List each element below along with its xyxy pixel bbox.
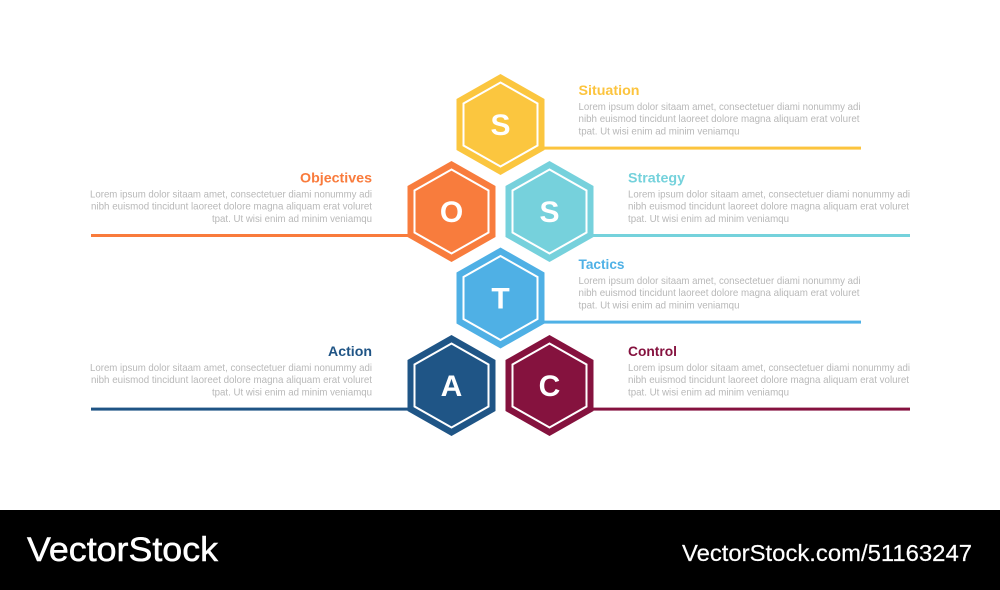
footer image id: VectorStock.com/51163247 [682,540,972,566]
text block: Action: nibh euismod tincidunt laoreet dolore magna aliquam erat voluret [91,375,372,386]
hexagon: S Strategy [506,161,594,262]
heading: Situation: Situation [578,82,640,98]
text block: Strategy [628,190,910,225]
heading: Strategy: Strategy [628,170,685,186]
panel: Tactics [456,248,861,348]
panel: Control [506,335,910,436]
text block: Action: Lorem ipsum dolor sitaam amet, consectetuer diami nonummy adi [90,363,372,374]
hexagon: O Objectives [408,161,496,262]
text block: Control: tpat. Ut wisi enim ad minim veniamqu [628,388,789,398]
text block: Tactics [578,276,860,312]
text block: Strategy: tpat. Ut wisi enim ad minim veniamqu [628,214,789,225]
heading: Objectives: Objectives [300,170,372,186]
text block: Situation: Lorem ipsum dolor sitaam amet, consectetuer diami nonummy adi [578,102,860,113]
text block: Action: tpat. Ut wisi enim ad minim veniamqu [212,388,372,398]
panel: Situation [456,74,861,175]
heading: Control: Control [628,343,677,359]
text block: Objectives: tpat. Ut wisi enim ad minim veniamqu [212,214,372,225]
hexagon: T Tactics: T [491,282,510,316]
text block: Control: nibh euismod tincidunt laoreet dolore magna aliquam erat voluret [628,375,909,386]
text block: Strategy: Lorem ipsum dolor sitaam amet, consectetuer diami nonummy adi [628,190,910,200]
text block: Situation: tpat. Ut wisi enim ad minim veniamqu [578,126,740,138]
hexagon: S Situation: S [490,109,511,142]
heading: Tactics: Tactics [578,256,625,272]
text block: Tactics: Lorem ipsum dolor sitaam amet, consectetuer diami nonummy adi [578,276,860,287]
hexagon: O Objectives: O [440,196,463,229]
text block: Tactics: nibh euismod tincidunt laoreet dolore magna aliquam erat voluret [578,288,860,299]
hexagon: C Control [506,335,594,436]
text block: Control: Lorem ipsum dolor sitaam amet, consectetuer diami nonummy adi [628,363,910,374]
text block: Action [90,363,372,398]
connector line: Action [91,408,412,411]
text block: Strategy: nibh euismod tincidunt laoreet dolore magna aliquam erat voluret [628,202,909,212]
footer bar [0,510,1000,590]
footer logo text: VectorStock [27,531,219,569]
panel: Strategy [506,161,910,262]
hexagon: S Situation [456,74,544,175]
hexagon: T Tactics [456,248,544,348]
panel: Objectives [90,161,496,262]
connector line: Control [589,408,910,411]
text block: Objectives: nibh euismod tincidunt laoreet dolore magna aliquam erat voluret [91,202,372,212]
connector line: Tactics [540,321,861,324]
panel: Action [90,335,496,436]
connector line: Situation [540,147,861,150]
heading: Action: Action [328,343,372,359]
text block: Situation [578,102,860,138]
text block: Objectives [90,190,372,225]
hexagon: S Strategy: S [539,196,560,229]
text block: Tactics: tpat. Ut wisi enim ad minim veniamqu [578,300,740,312]
connector line: Strategy [589,234,910,237]
text block: Situation: nibh euismod tincidunt laoreet dolore magna aliquam erat voluret [578,114,860,125]
hexagon: C Control: C [539,370,560,403]
connector line: Objectives [91,234,412,237]
text block: Control [628,363,910,398]
hexagon: A Action: A [441,370,462,403]
hexagon: A Action [408,335,496,436]
text block: Objectives: Lorem ipsum dolor sitaam amet, consectetuer diami nonummy adi [90,190,372,200]
